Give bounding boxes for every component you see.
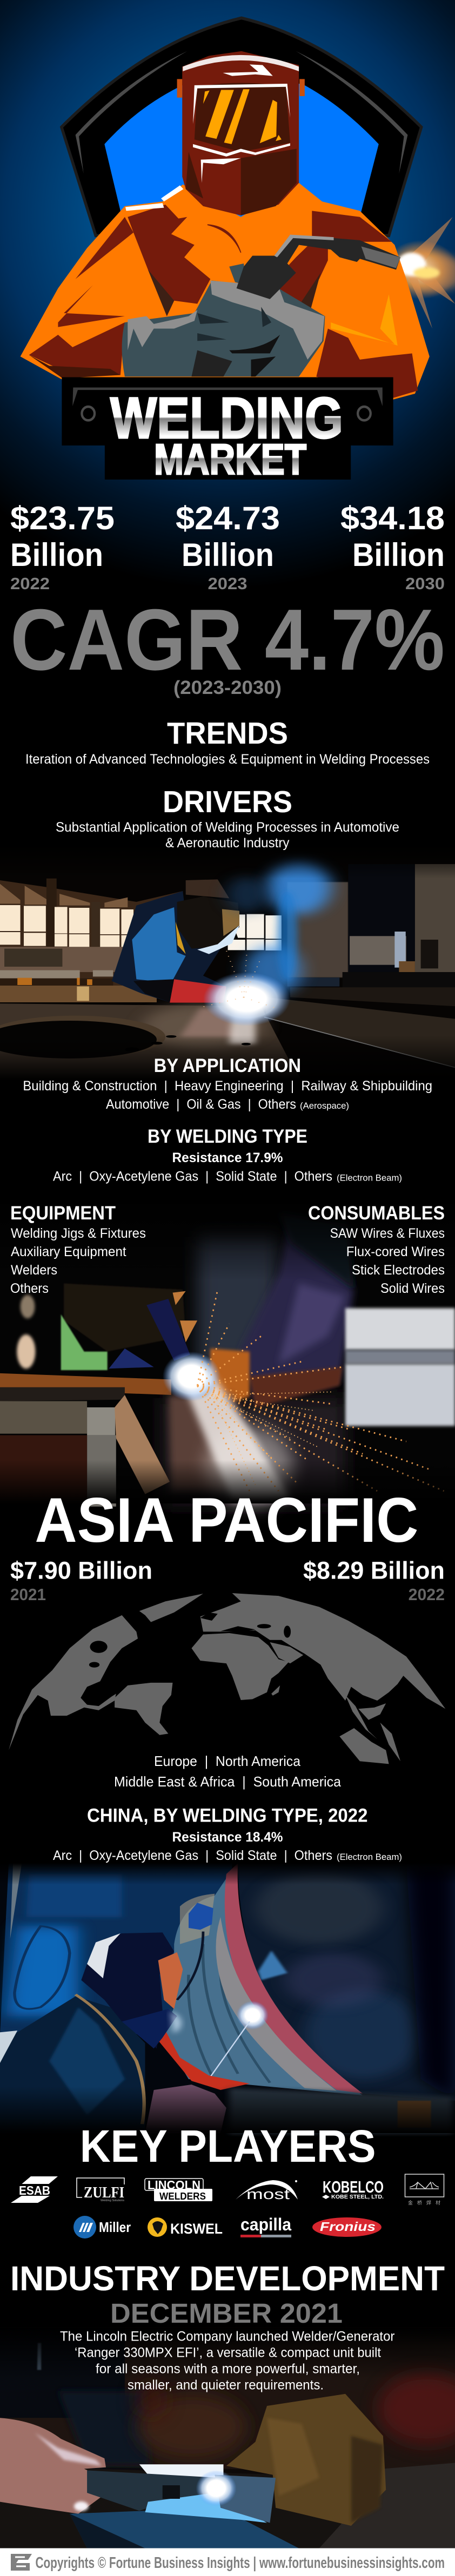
title: welding market: MARKET [154,435,306,483]
development description: ‘Ranger 330MPX EFI’, a versatile & compact unit built [75,2345,381,2360]
other regions: Middle East & Africa | South America [114,1773,342,1790]
logo: ESAB [11,2176,58,2203]
industry development heading: INDUSTRY DEVELOPMENT [10,2259,445,2298]
logo: Golden Bridge: 金 桥 焊 材 [408,2200,440,2206]
by welding type: Arc | Oxy-Acetylene Gas | Solid State | Others [53,1169,332,1184]
market size 2023 [176,500,280,593]
logo: Zulfi: Welding Solutions [101,2199,125,2202]
regional value 2022 [303,1556,445,1604]
by welding type [53,1126,402,1184]
market size 2023: Billion [182,537,274,573]
china by welding type: Resistance 18.4% [172,1830,283,1845]
equipment list: Welders [11,1263,57,1278]
footer [0,2548,455,2576]
spark from torch [383,217,455,328]
trends [25,716,430,767]
logo: Kobelco: KOBELCO [323,2177,384,2196]
china by welding type: CHINA, BY WELDING TYPE, 2022 [87,1805,367,1826]
photo: welder in workshop [0,844,455,1080]
logo: Zulfi [77,2178,125,2202]
photo: hands and glowing pipe [0,2328,455,2548]
by welding type: BY WELDING TYPE [148,1126,307,1147]
development description: smaller, and quieter requirements. [128,2377,324,2392]
trends: TRENDS [167,716,288,751]
logo: Zulfi: ZULFI [84,2184,124,2201]
header background [0,0,455,594]
market size 2030: $34.18 [340,500,445,536]
logo: Most [236,2180,298,2202]
consumables list: Flux-cored Wires [346,1244,445,1259]
china by welding type: (Electron Beam) [337,1852,402,1862]
market size 2022: Billion [10,537,103,573]
by application: BY APPLICATION [154,1055,301,1076]
logo: Most: most [246,2186,290,2202]
consumables list: Stick Electrodes [352,1263,445,1278]
equipment list: Others [10,1281,49,1296]
shield [62,18,421,235]
suit torso [21,183,430,400]
logo: Lincoln Welders: LINCOLN [148,2178,200,2192]
market size 2030 [340,500,445,593]
market size 2023: 2023 [208,574,247,593]
consumables list: Solid Wires [380,1281,445,1296]
drivers [56,785,399,851]
equipment list: Auxiliary Equipment [11,1244,126,1259]
footer logo [11,2554,32,2571]
china by welding type: Arc | Oxy-Acetylene Gas | Solid State | Others [53,1848,332,1863]
consumables list [308,1203,445,1296]
consumables list: SAW Wires & Fluxes [330,1226,445,1241]
globe map [9,1593,445,1764]
title: welding market [110,385,343,483]
market size 2023: $24.73 [176,500,280,536]
logo: Kobelco: KOBE STEEL, LTD. [331,2194,384,2200]
market size 2022: 2022 [10,574,50,593]
drivers: DRIVERS [163,785,292,819]
drivers: & Aeronautic Industry [165,835,290,851]
development description [60,2329,394,2392]
by application [23,1055,432,1112]
title: welding market: WELDING [110,385,343,450]
logo: Lincoln Welders: WELDERS [159,2191,206,2202]
photo: welder at large pipe [0,1863,455,2133]
illustration: welder mascot in shield [21,18,455,480]
logo: Kobelco [322,2177,384,2200]
regional value 2021 [10,1556,152,1604]
logo: Miller: Miller [99,2219,131,2235]
development date: DECEMBER 2021 [110,2298,343,2329]
trends: Iteration of Advanced Technologies & Equipment in Welding Processes [25,752,430,767]
regional value 2021: 2021 [10,1585,46,1604]
title plate [62,377,393,480]
gloved hands [122,264,325,376]
logo: Kiswel: KISWEL [170,2221,223,2237]
regional value 2022: 2022 [409,1585,445,1604]
asia pacific heading: ASIA PACIFIC [35,1485,418,1555]
market size 2022: $23.75 [10,500,115,536]
logo: Golden Bridge [405,2174,444,2206]
by application: Automotive | Oil & Gas | Others [106,1097,296,1112]
logo: Lincoln Welders [145,2178,212,2202]
drivers: Substantial Application of Welding Processes in Automotive [56,820,399,835]
logo: Capilla: capilla [240,2215,291,2234]
photo: sparks from torch [0,1193,455,1507]
logo: Fronius: Fronius [320,2220,376,2234]
development description: for all seasons with a more powerful, smarter, [96,2361,360,2376]
market size 2030: 2030 [405,574,445,593]
other regions [114,1753,342,1790]
development description: The Lincoln Electric Company launched Welder/Generator [60,2329,394,2344]
consumables list: CONSUMABLES [308,1203,445,1224]
by application: (Aerospace) [300,1101,349,1111]
welding torch [237,235,400,299]
logo: Fronius [312,2217,382,2237]
regional value 2022: $8.29 Billion [303,1556,445,1584]
equipment list [10,1203,146,1296]
logo: Miller [73,2216,131,2238]
market size 2030: Billion [352,537,445,573]
equipment list: Welding Jigs & Fixtures [11,1226,146,1241]
key players heading: KEY PLAYERS [80,2121,376,2172]
logo: ESAB: ESAB [19,2183,50,2197]
helmet [177,51,305,215]
by welding type: Resistance 17.9% [172,1150,283,1165]
equipment list: EQUIPMENT [10,1203,116,1224]
other regions: Europe | North America [154,1753,301,1769]
logo: Kiswel [148,2217,223,2237]
regional value 2021: $7.90 Billion [10,1556,152,1584]
market size 2022 [10,500,115,593]
CAGR: (2023-2030) [173,677,282,698]
by application: Building & Construction | Heavy Engineering | Railway & Shipbuilding [23,1078,432,1094]
by welding type: (Electron Beam) [337,1173,402,1183]
china by welding type [53,1805,402,1863]
